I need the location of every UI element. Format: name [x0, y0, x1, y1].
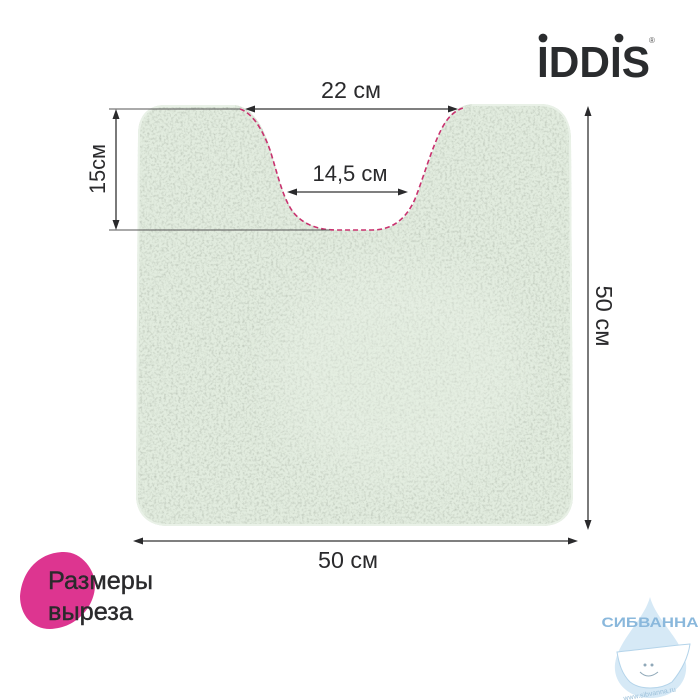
- 50 cm height dimension: [584, 106, 617, 530]
- 50 cm height dimension: 50 см: [591, 285, 617, 347]
- 14,5 cm dimension: 14,5 см: [312, 161, 388, 186]
- 22 cm dimension: [245, 77, 458, 112]
- watermark: Sibvanna: СИБВАННА: [602, 614, 698, 630]
- badge: cutout sizes: выреза: [48, 598, 133, 626]
- badge: cutout sizes: [20, 552, 153, 629]
- 50 cm width dimension: 50 см: [318, 547, 378, 573]
- logo: IDDIS: IDDIS: [537, 38, 650, 87]
- 50 cm width dimension: [133, 538, 578, 573]
- logo: IDDIS: ®: [649, 36, 655, 45]
- 22 cm dimension: 22 см: [321, 77, 381, 103]
- 14,5 cm dimension: [287, 161, 408, 196]
- cutout dashed outline: [240, 108, 463, 230]
- rug: [136, 104, 573, 526]
- 15 cm dimension: 15см: [85, 144, 110, 194]
- watermark: Sibvanna: [602, 597, 698, 700]
- badge: cutout sizes: Размеры: [48, 567, 153, 595]
- 15 cm dimension: [85, 109, 330, 230]
